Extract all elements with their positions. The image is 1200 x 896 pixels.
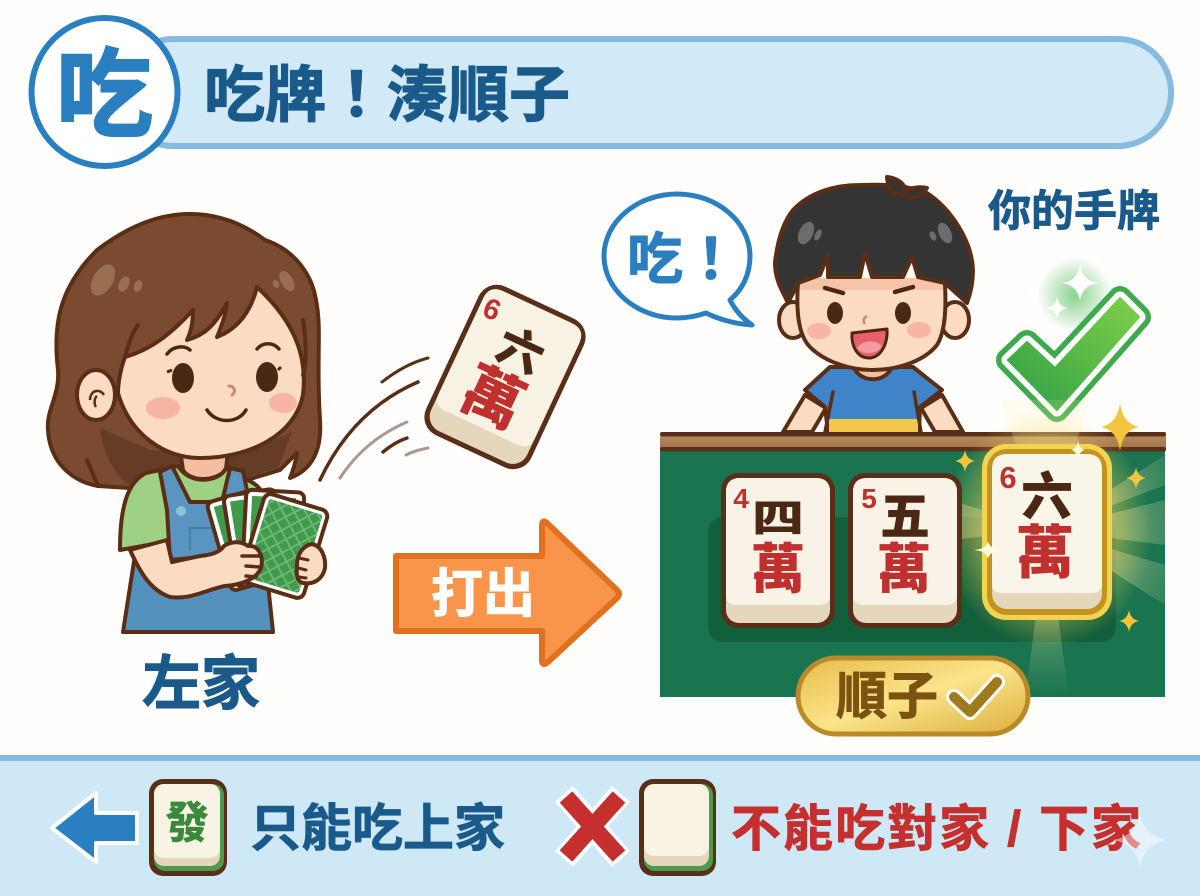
mahjong cards fan — [206, 488, 329, 600]
eyebrows — [167, 344, 279, 354]
tile: 六萬 highlighted: 六 — [1021, 455, 1073, 530]
cheeks — [146, 393, 297, 419]
ears — [779, 302, 969, 338]
big green check mark — [1008, 298, 1139, 410]
light rays — [950, 400, 1165, 700]
hair shadow — [100, 428, 292, 485]
green shirt — [120, 466, 262, 550]
eyebrows — [825, 287, 913, 293]
right hand — [297, 544, 325, 583]
thrown tile: 六萬 — [418, 278, 592, 476]
finger lines — [242, 556, 260, 577]
tile: 六萬 highlighted: 萬 — [1016, 506, 1074, 590]
face — [118, 287, 304, 458]
title: 吃牌！湊順子 — [204, 61, 570, 129]
hair notch — [87, 460, 98, 486]
open mouth — [852, 329, 887, 358]
rule text: not allowed: 不能吃對家 / 下家 — [731, 801, 1141, 857]
round badge — [32, 18, 178, 166]
ear — [77, 370, 115, 420]
shirt hem — [829, 419, 918, 432]
tile: 五萬: 5 — [861, 483, 877, 514]
eyes — [827, 302, 911, 324]
neck — [180, 450, 228, 479]
tile: 六萬 highlighted — [982, 444, 1112, 620]
speech bubble — [604, 194, 752, 325]
tile: 四萬 — [721, 473, 835, 628]
arms — [783, 395, 963, 432]
hair — [775, 185, 973, 303]
character: boy — [775, 177, 973, 432]
thrown tile: 六萬: 6 — [478, 292, 505, 328]
glow — [942, 412, 1152, 648]
corner sparkle — [1113, 813, 1167, 867]
tile: 發: 發 — [165, 787, 209, 851]
speech bubble: 吃！ — [627, 228, 739, 291]
hair tuft — [887, 177, 927, 198]
banner bar — [120, 39, 1171, 146]
tile: 四萬: 四 — [752, 488, 804, 544]
mouth — [207, 410, 246, 420]
badge: sequence: 順子 — [836, 668, 938, 725]
gold sparkles — [955, 403, 1146, 632]
bangs shadow — [800, 278, 943, 290]
thrown tile: 六萬: 六 — [487, 309, 556, 388]
wood edge — [660, 432, 1166, 452]
overalls bib — [160, 466, 256, 560]
tile: 發 — [149, 779, 227, 876]
arm and left hand — [130, 540, 262, 598]
neck — [852, 362, 893, 379]
face — [797, 283, 945, 370]
hair highlights — [795, 219, 955, 247]
cheeks — [807, 322, 931, 339]
hair highlights — [86, 260, 298, 300]
nose — [229, 386, 234, 395]
thrown tile: 六萬: 萬 — [449, 342, 541, 446]
tile: 五萬: 萬 — [877, 525, 931, 604]
rule text: allowed: 只能吃上家 — [250, 800, 505, 857]
bottom rule panel — [0, 755, 1200, 896]
left arrow icon — [52, 793, 137, 862]
label: your hand: 你的手牌 — [988, 188, 1160, 236]
sparkle glow above check — [1037, 257, 1113, 333]
character: left player girl — [48, 214, 329, 632]
blue shirt — [805, 367, 942, 432]
hair strands — [125, 320, 306, 375]
tile: 五萬 — [848, 473, 962, 628]
red cross icon — [564, 794, 621, 859]
arrow: discard: 打出 — [431, 566, 535, 624]
round badge: 吃 — [56, 41, 153, 150]
eyes — [167, 362, 281, 393]
tile: 四萬: 萬 — [751, 525, 805, 604]
arrow: discard — [396, 521, 619, 664]
header banner — [32, 18, 1171, 166]
tile tray shadow — [708, 517, 1116, 642]
overalls skirt — [123, 555, 273, 632]
tile: blank — [639, 779, 716, 876]
tile: 六萬 highlighted: 6 — [999, 460, 1017, 495]
badge: sequence — [798, 658, 1028, 734]
nose — [864, 316, 867, 324]
motion lines — [320, 358, 428, 480]
shirt sleeve lines — [825, 392, 921, 432]
label: left player: 左家 — [142, 651, 260, 717]
felt — [660, 448, 1165, 697]
tile: 五萬: 五 — [880, 477, 930, 549]
mahjong table — [660, 400, 1166, 700]
hair — [48, 214, 320, 488]
tile: 四萬: 4 — [733, 483, 749, 514]
